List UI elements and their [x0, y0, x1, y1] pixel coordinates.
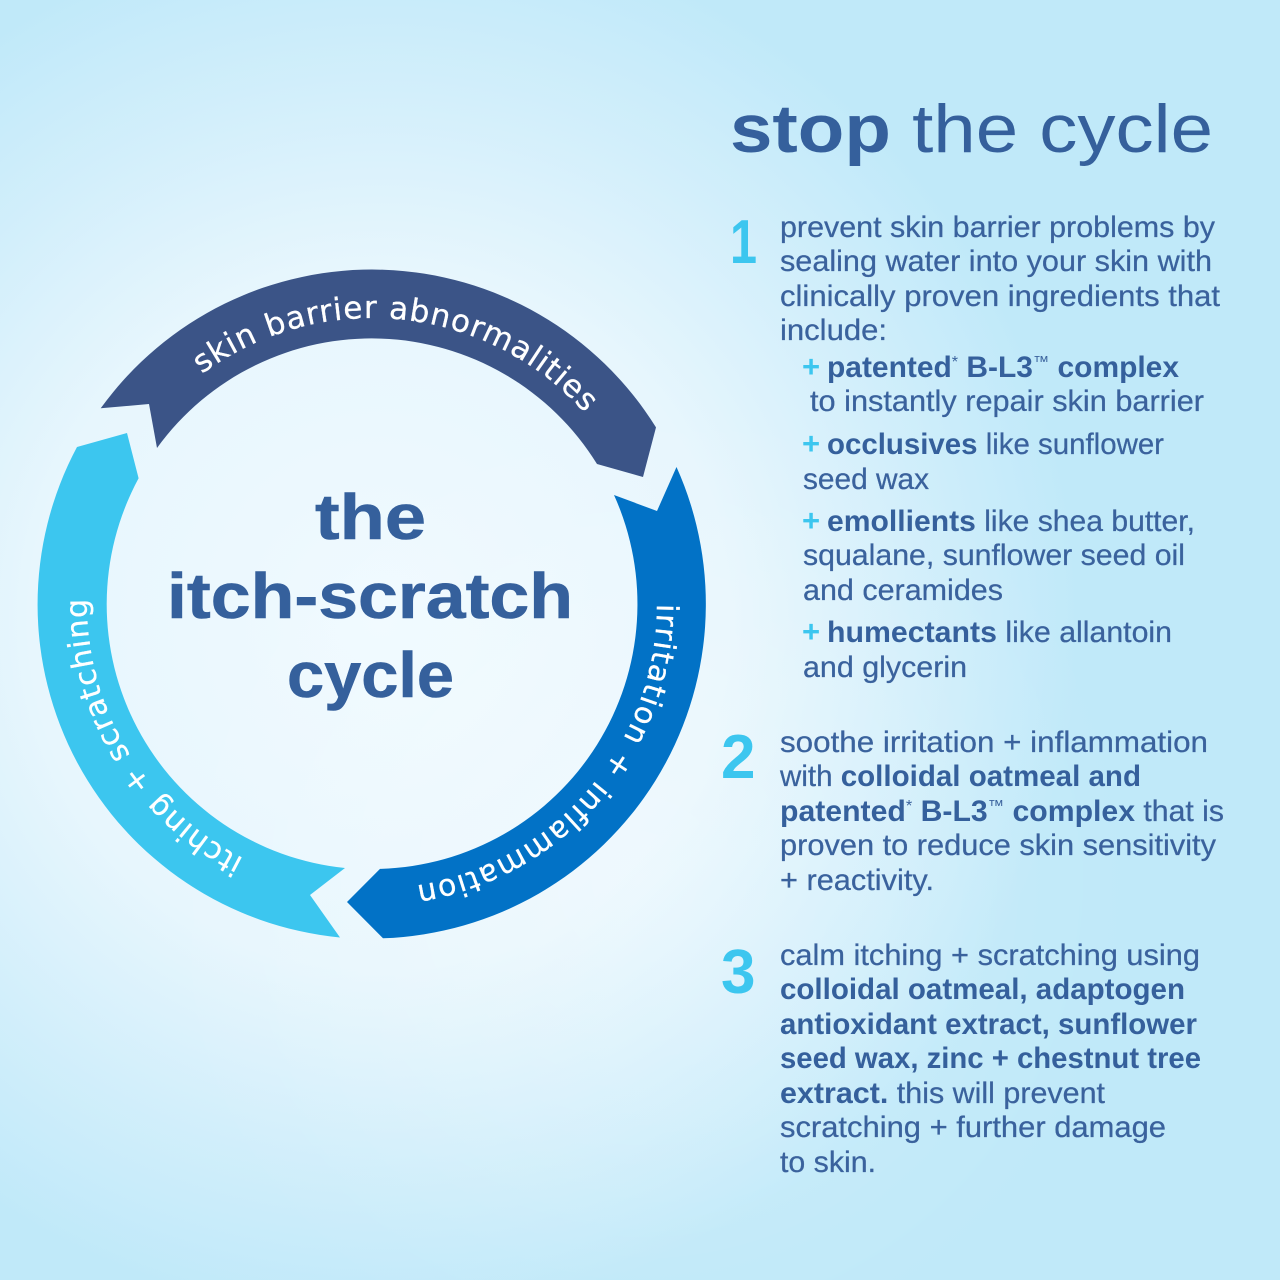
- step 3 text: seed wax, zinc + chestnut tree: [780, 1042, 1201, 1075]
- step 2: soothe irritation: [721, 723, 1224, 897]
- step 2 text: soothe irritation + inflammation: [780, 726, 1208, 759]
- step 2 text: [779, 726, 1224, 897]
- step 3 text: antioxidant extract, sunflower: [780, 1008, 1198, 1041]
- ingredient: emollients: squalane, sunflower seed oil: [803, 539, 1185, 572]
- ingredient: humectants: [802, 614, 1172, 684]
- step 2 text: with colloidal oatmeal and: [779, 760, 1141, 793]
- step 2 text: that is: [1143, 795, 1222, 828]
- step 3 text: scratching + further damage: [780, 1111, 1166, 1144]
- ingredient: patented B-L3 complex: patented: [827, 351, 952, 384]
- step 3: calm itching: [721, 938, 1201, 1179]
- step 3 text: colloidal oatmeal, adaptogen: [780, 973, 1185, 1006]
- ingredient: emollients: and ceramides: [803, 574, 1003, 607]
- ingredient: occlusives: [802, 426, 1164, 496]
- ingredient: humectants: and glycerin: [803, 651, 967, 684]
- arc segment: itching + scratching: [38, 433, 345, 938]
- cycle centre title: [167, 481, 573, 711]
- cycle centre title: the: [315, 481, 426, 553]
- ingredient: occlusives: seed wax: [803, 463, 929, 496]
- step 2 text: *: [906, 798, 912, 815]
- cycle centre title: itch-scratch: [167, 560, 573, 632]
- step 1 intro text: prevent skin barrier problems by: [780, 211, 1215, 244]
- arc segment: itching + scratching: itching + scratching: [66, 601, 242, 878]
- number 2: 2: [721, 723, 755, 792]
- arc segment: irritation + inflammation: irritation + inflammation: [418, 606, 680, 901]
- arc segment: skin barrier abnormalities: [100, 270, 656, 477]
- step 1 intro text: sealing water into your skin with: [780, 245, 1212, 278]
- number 3: 3: [721, 938, 755, 1007]
- heading: stop the cycle: stop the cycle: [730, 91, 1213, 167]
- step 2 text: proven to reduce skin sensitivity: [780, 829, 1216, 862]
- step 2 text: B-L3: [912, 795, 988, 828]
- cycle centre title: cycle: [287, 639, 454, 711]
- number 1: 1: [730, 208, 757, 277]
- arc segment: skin barrier abnormalities: skin barrier abnormalities: [195, 296, 596, 410]
- step 3 text: extract. this will prevent: [780, 1077, 1105, 1110]
- ingredient: patented B-L3 complex: to instantly repair skin barrier: [810, 385, 1204, 418]
- step 2 text: patented: [780, 795, 906, 828]
- ingredient: patented B-L3 complex: [802, 349, 1204, 418]
- ingredient: emollients: emollients like shea butter,: [827, 505, 1195, 538]
- ingredient: patented B-L3 complex: ™: [1033, 354, 1049, 371]
- ingredient: humectants: +: [802, 614, 820, 649]
- ingredient: humectants: humectants like allantoin: [827, 616, 1172, 649]
- ingredient: patented B-L3 complex: complex: [1049, 351, 1180, 384]
- step 1 intro text: include:: [780, 314, 887, 347]
- step 1 intro text: clinically proven ingredients that: [780, 280, 1220, 313]
- step 3 text: calm itching + scratching using: [780, 939, 1200, 972]
- ingredient: emollients: +: [802, 503, 820, 538]
- ingredient: occlusives: occlusives like sunflower: [827, 428, 1164, 461]
- step 1: prevent skin barrier problems: [730, 208, 1220, 684]
- step 2 text: + reactivity.: [780, 864, 934, 897]
- ingredient: emollients: [802, 503, 1195, 607]
- ingredient: patented B-L3 complex: B-L3: [958, 351, 1033, 384]
- step 2 text: ™: [988, 798, 1004, 815]
- ingredient: occlusives: +: [802, 426, 820, 461]
- step 2 text: complex: [1004, 795, 1136, 828]
- ingredient: patented B-L3 complex: +: [802, 349, 820, 384]
- step 1 intro text: [780, 211, 1220, 347]
- ingredient: patented B-L3 complex: *: [952, 354, 958, 371]
- arc segment: irritation + inflammation: [347, 467, 706, 938]
- step 3 text: to skin.: [780, 1146, 876, 1179]
- panel: itch-scratch cycle diagram: [38, 270, 706, 938]
- step 3 text: [780, 939, 1201, 1179]
